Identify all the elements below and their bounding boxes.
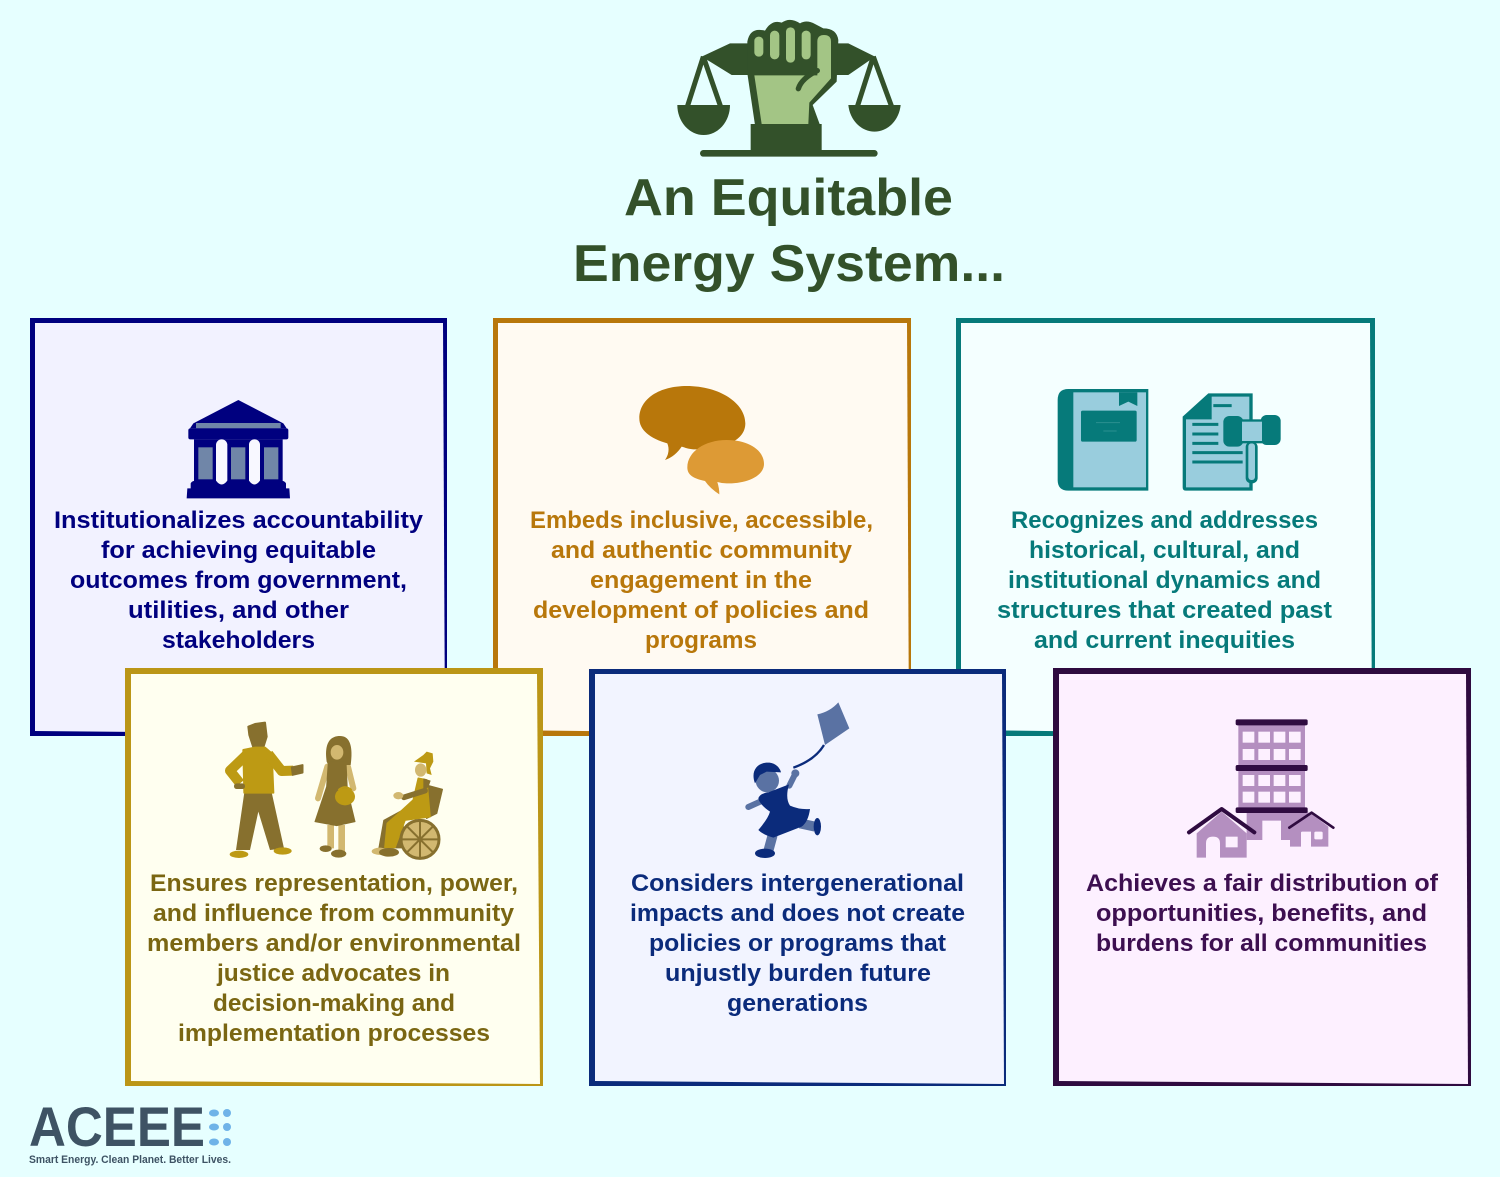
text: intergenerational: unjustly burden future (665, 960, 931, 987)
text: representation: decision-making and (213, 990, 455, 1017)
text: intergenerational: generations (727, 990, 868, 1017)
panel: intergenerational impacts (589, 669, 1006, 1086)
icon: child flying kite (748, 702, 849, 858)
text: intergenerational (630, 870, 965, 1017)
panel: fair distribution (1053, 668, 1471, 1086)
icon: speech bubbles (639, 386, 764, 494)
icon: law book and gavel (1058, 389, 1281, 491)
logo: ACEEE: ACEEE (29, 1095, 205, 1158)
text: representation (147, 870, 521, 1047)
text: accountability: utilities, and other (128, 597, 349, 624)
panel: historical dynamics (956, 318, 1375, 736)
logo: ACEEE: Smart Energy. Clean Planet. Better Lives. (29, 1154, 231, 1166)
text: fair distribution: burdens for all communities (1096, 930, 1427, 957)
text: inequities: historical, cultural, and (1029, 537, 1300, 564)
text: representation: and influence from community (153, 900, 514, 927)
text: inequities: and current inequities (1034, 627, 1295, 654)
icon: apartment building and houses (1189, 719, 1333, 858)
text: inequities: Recognizes and addresses (1011, 507, 1318, 534)
text: community engagement: Embeds inclusive, accessible, (530, 507, 873, 534)
text: accountability: stakeholders (162, 627, 315, 654)
text: inequities: institutional dynamics and (1008, 567, 1321, 594)
icon: logo dots (209, 1109, 231, 1146)
text: representation: implementation processes (178, 1020, 490, 1047)
text: accountability: outcomes from government, (70, 567, 407, 594)
text: representation: justice advocates in (216, 960, 450, 987)
text: community engagement (530, 507, 873, 654)
text: intergenerational: Considers intergenerational (631, 870, 964, 897)
panel: representation and power (125, 668, 543, 1086)
text: accountability: Institutionalizes accountability (54, 507, 423, 534)
text: fair distribution (1086, 870, 1439, 957)
text: inequities (997, 507, 1332, 654)
text: representation: Ensures representation, power, (150, 870, 518, 897)
title: Energy System... (573, 235, 1005, 293)
title (573, 169, 1005, 293)
text: fair distribution: opportunities, benefits, and (1096, 900, 1427, 927)
text: community engagement: and authentic community (551, 537, 852, 564)
text: community engagement: programs (645, 627, 757, 654)
icon: fist gripping balance scale (677, 20, 901, 157)
text: accountability: for achieving equitable (101, 537, 376, 564)
icon: three people (230, 723, 442, 858)
title: An Equitable (624, 169, 953, 227)
text: intergenerational: impacts and does not create (630, 900, 965, 927)
text: accountability (54, 507, 423, 654)
text: community engagement: development of policies and (533, 597, 869, 624)
text: representation: members and/or environmental (147, 930, 521, 957)
text: inequities: structures that created past (997, 597, 1332, 624)
text: intergenerational: policies or programs that (649, 930, 946, 957)
panel: community engagement (493, 318, 911, 736)
text: fair distribution: Achieves a fair distribution of (1086, 870, 1439, 897)
text: community engagement: engagement in the (590, 567, 812, 594)
icon: government building (187, 400, 290, 498)
panel: institutionalizes accountability (30, 318, 447, 736)
